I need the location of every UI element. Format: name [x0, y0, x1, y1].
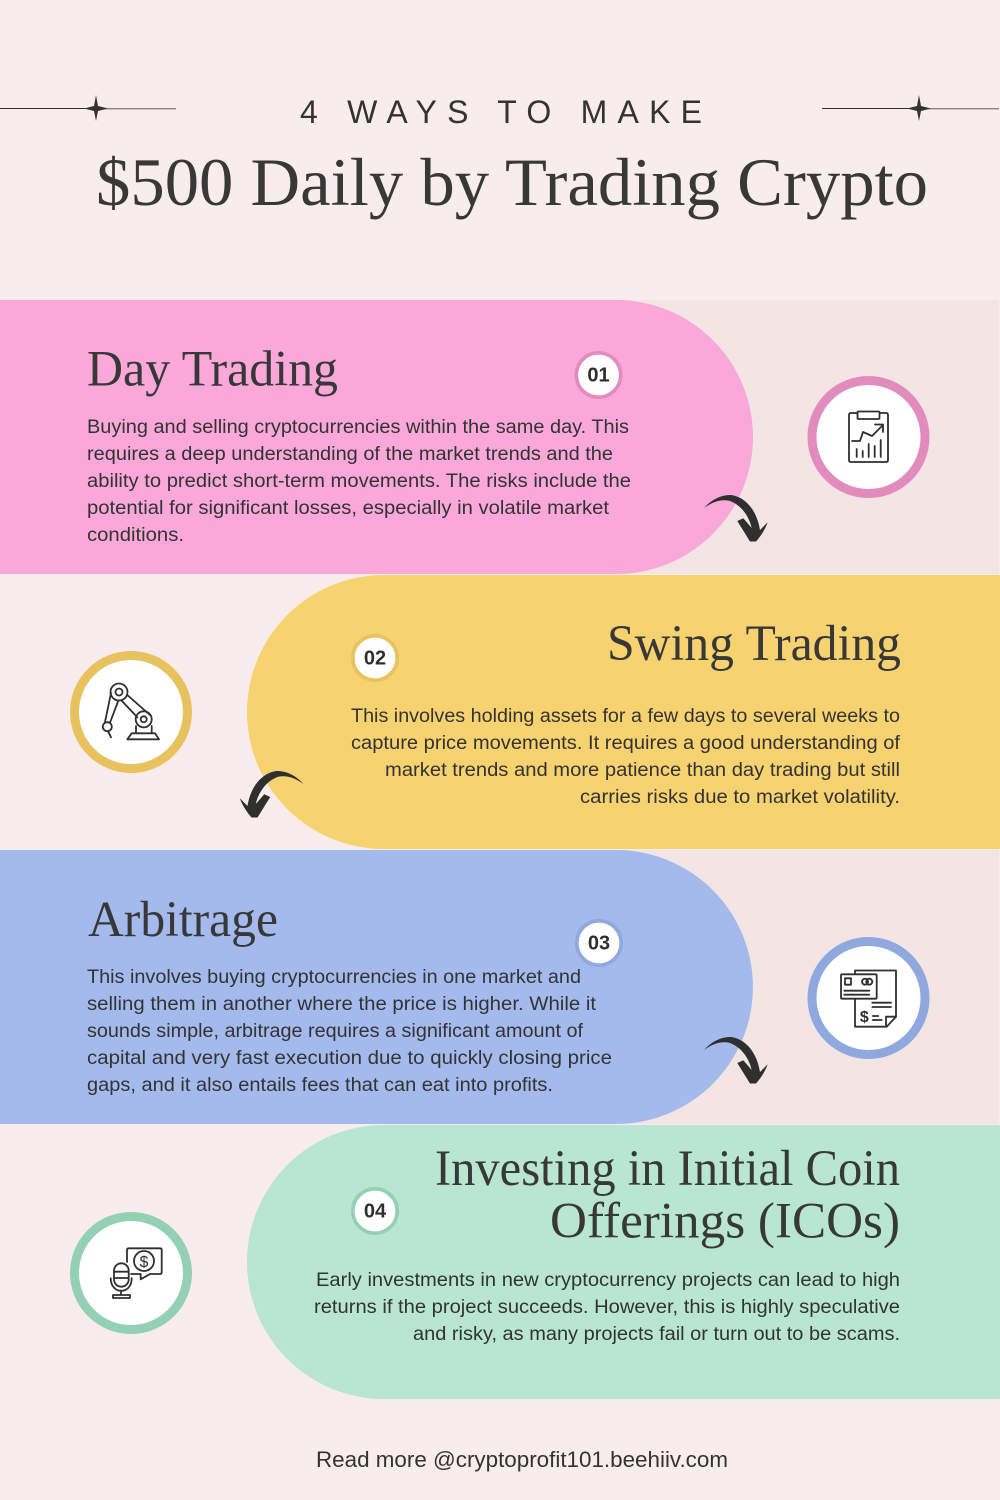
text block: day trading: ability to predict short-term movements. The risks include the: [87, 471, 631, 492]
icon: clipboard chart: [812, 380, 925, 494]
badge: 01: [576, 353, 621, 397]
text block: day trading: conditions.: [87, 525, 184, 546]
text block: arbitrage: gaps, and it also entails fees that can eat into profits.: [87, 1075, 553, 1096]
heading: initial coin offerings: [435, 1141, 900, 1250]
text block: day trading: requires a deep understanding of the market trends and the: [87, 444, 613, 465]
text block: initial coin offerings: Early investments in new cryptocurrency projects can lead to high: [316, 1270, 900, 1291]
text block: arbitrage: sounds simple, arbitrage requires a significant amount of: [87, 1021, 584, 1042]
badge: 02: [353, 636, 397, 680]
heading: swing trading: Swing Trading: [607, 616, 901, 672]
text block: initial coin offerings: [314, 1270, 900, 1345]
heading: initial coin offerings: Offerings (ICOs): [550, 1194, 900, 1250]
badge: 03: 03: [588, 932, 610, 954]
text block: swing trading: carries risks due to market volatility.: [580, 787, 900, 808]
footer: Read more @cryptoprofit101.beehiiv.com: [316, 1447, 728, 1472]
badge: 04: [353, 1189, 397, 1233]
icon: card and invoice: [812, 942, 925, 1054]
arrow: swing trading to arbitrage: [240, 771, 304, 818]
heading: day trading: Day Trading: [87, 342, 338, 398]
icon: card and invoice: $: [860, 1009, 869, 1026]
text block: arbitrage: This involves buying cryptocurrencies in one market and: [87, 967, 581, 988]
badge: 04: 04: [364, 1200, 387, 1222]
text block: swing trading: [351, 706, 901, 808]
panel: swing trading: [74, 575, 1000, 849]
badge: 03: [577, 921, 621, 965]
heading: arbitrage: Arbitrage: [88, 892, 278, 948]
text block: swing trading: capture price movements. It requires a good understanding of: [351, 733, 901, 754]
decoration: left sparkle line: [0, 95, 176, 121]
heading: initial coin offerings: Investing in Initial Coin: [435, 1141, 900, 1197]
title: [96, 94, 928, 220]
title: main heading: $500 Daily by Trading Crypto: [96, 144, 928, 220]
panel: day trading: [0, 300, 999, 574]
title: kicker: 4 WAYS TO MAKE: [300, 94, 702, 130]
text block: day trading: Buying and selling cryptocurrencies within the same day. This: [87, 417, 629, 438]
text block: swing trading: market trends and more patience than day trading but still: [385, 760, 900, 781]
text block: arbitrage: selling them in another where the price is higher. While it: [87, 994, 597, 1015]
text block: day trading: [87, 417, 631, 546]
text block: arbitrage: capital and very fast execution due to quickly closing price: [87, 1048, 612, 1069]
icon: microphone and dollar bubble: [74, 1216, 188, 1330]
panel: arbitrage: [0, 850, 999, 1124]
text block: initial coin offerings: and risky, as many projects fail or turn out to be scams.: [413, 1324, 900, 1345]
icon: microphone and dollar bubble: $: [140, 1254, 149, 1271]
badge: 01: 01: [587, 364, 610, 386]
arrow: day trading to swing trading: [704, 495, 768, 542]
text block: initial coin offerings: returns if the project succeeds. However, this is highly speculative: [314, 1297, 900, 1318]
text block: arbitrage: [87, 967, 612, 1096]
arrow: arbitrage to initial coin offerings: [704, 1037, 768, 1084]
badge: 02: 02: [364, 648, 386, 670]
text block: swing trading: This involves holding assets for a few days to several weeks to: [351, 706, 900, 727]
decoration: right sparkle line: [822, 95, 999, 121]
panel: initial coin offerings: [74, 1125, 1000, 1399]
icon: robot arm: [74, 656, 188, 768]
text block: day trading: potential for significant losses, especially in volatile market: [87, 498, 610, 519]
